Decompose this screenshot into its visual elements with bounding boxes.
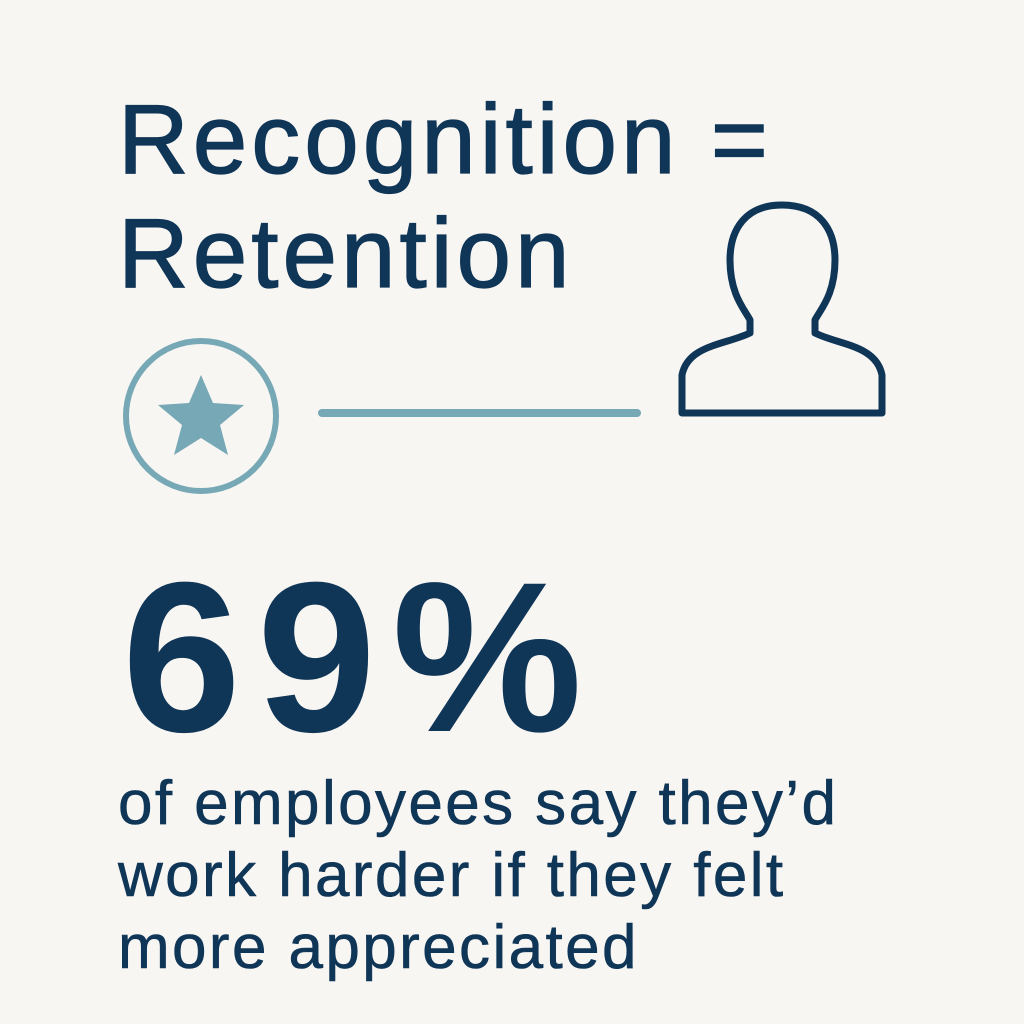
- icon: person: [678, 202, 886, 416]
- title: [118, 84, 772, 308]
- title: Recognition =: [118, 84, 772, 194]
- stat description: [118, 769, 838, 982]
- big stat: 69%: [122, 538, 598, 777]
- stat description: more appreciated: [118, 913, 639, 982]
- title: Retention: [118, 198, 574, 308]
- connector line: [318, 409, 641, 417]
- icon: star in circle: [123, 338, 279, 494]
- stat description: of employees say they’d: [118, 769, 838, 838]
- stat description: work harder if they felt: [118, 841, 786, 910]
